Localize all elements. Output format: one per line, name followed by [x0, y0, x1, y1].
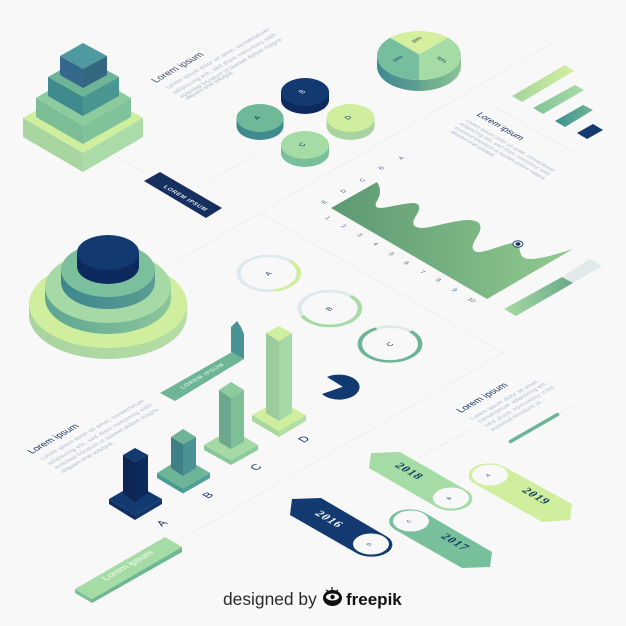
pill 2018 [369, 452, 472, 511]
folded ribbon label: LOREM IPSUM [180, 363, 226, 390]
bottom ribbon: Lorem ipsum: Lorem ipsum [99, 549, 157, 583]
area chart: 9 [450, 288, 458, 293]
bar axis letters [154, 434, 313, 528]
disc C [281, 131, 329, 167]
isometric bar C [204, 382, 258, 465]
text block: top right: aliquam erat volutpat. [448, 130, 497, 158]
text block: bottom left: Lorem ipsum dolor sit amet, consectetuer [40, 399, 147, 461]
area chart: D [340, 189, 349, 194]
text block: top right: adipiscing elit, sed diam nonummy nibh [457, 122, 552, 177]
area chart: 3 [355, 233, 363, 238]
area chart: 10 [465, 297, 477, 304]
ring C [346, 319, 434, 369]
area chart: C [359, 178, 368, 183]
folded ribbon label [160, 321, 244, 401]
stacked cylinders [29, 235, 187, 359]
disc A: A [253, 115, 263, 121]
heading: Lorem ipsum bottom right: Lorem ipsum [454, 381, 511, 415]
pie chart 3D: 30% [411, 36, 425, 44]
pill 2017: 2017 [437, 531, 473, 552]
bottom ribbon: Lorem ipsum [75, 537, 182, 603]
pill 2018: B [446, 496, 454, 501]
pill 2016: 2016 [311, 508, 347, 529]
ring C: C [385, 342, 396, 348]
disc B [281, 78, 329, 114]
area chart: 7 [418, 270, 426, 275]
icon: freepik mascot [323, 587, 342, 606]
bar axis letters: D [296, 434, 313, 444]
navy label: LOREM IPSUM [144, 172, 222, 218]
navy label: LOREM IPSUM: LOREM IPSUM [161, 185, 208, 212]
progress bar [504, 259, 602, 316]
text block: bottom right: consectetuer adipiscing elit, [477, 381, 550, 424]
pill 2018: 2018 [391, 460, 427, 481]
area chart: 6 [402, 261, 410, 266]
text block: top left: euismod tincidunt ut laoreet dolore magna [179, 38, 285, 99]
pie chart 3D [377, 31, 461, 91]
pill 2019 [469, 463, 572, 522]
text block: bottom right: Lorem ipsum dolor sit amet, [470, 379, 542, 421]
heading: Lorem ipsum right: Lorem ipsum [474, 111, 527, 142]
area chart: 4 [371, 242, 379, 247]
text block: bottom right: euismod tincidunt ut. [490, 400, 545, 432]
area chart [321, 156, 573, 304]
text block: bottom left [25, 399, 161, 474]
area chart: 5 [387, 252, 395, 257]
pill 2019: 2019 [518, 485, 554, 506]
text block: top left: aliquam erat volutpat. [184, 70, 237, 101]
green rounded line [510, 414, 558, 442]
disc B: B [298, 89, 308, 95]
disc D: D [344, 115, 354, 121]
text block: bottom right: sed diam nonummy nibh [484, 385, 557, 428]
footer: designed by freepik [223, 587, 402, 609]
pill 2017 [389, 509, 492, 568]
heading: Lorem ipsum: Lorem ipsum [149, 51, 207, 85]
legend bars top right [512, 65, 603, 139]
text block: bottom left: euismod tincidunt ut laoreet dolore magna [54, 408, 161, 470]
pac-man pie [322, 375, 360, 400]
pill 2016: D [366, 542, 374, 547]
area chart: 1 [323, 216, 331, 221]
bar axis letters: C [248, 462, 265, 472]
disc C: C [298, 142, 308, 148]
ring B [287, 284, 372, 333]
bar axis letters: B [200, 491, 217, 500]
isometric bar A [109, 448, 162, 520]
pill 2017: C [406, 519, 414, 524]
pill 2019: A [485, 473, 493, 478]
text block: top right [448, 111, 557, 181]
pill 2016 [290, 498, 392, 557]
bar axis letters: A [154, 518, 171, 528]
heading: Lorem ipsum bottom left: Lorem ipsum [25, 422, 82, 456]
pyramid of stacked cubes [23, 43, 143, 172]
text block: bottom left: adipiscing elit, sed diam nonummy nibh [47, 403, 155, 466]
text block: top left: adipiscing elit, sed diam nonummy nibh [172, 33, 279, 95]
area chart: E [321, 200, 329, 205]
ring A [226, 249, 311, 298]
footer: designed by freepik: freepik [346, 590, 402, 609]
chart marker [513, 241, 523, 247]
pie chart 3D: 30% [434, 56, 449, 64]
text block: top right: Lorem ipsum dolor sit amet, consectetuer [463, 119, 557, 173]
text block: top left [149, 28, 285, 101]
disc D [326, 104, 374, 140]
text block: top right: euismod tincidunt ut laoreet dolore magna [452, 126, 547, 181]
disc A [236, 104, 284, 140]
text block: bottom left: aliquam erat volutpat. [60, 441, 117, 474]
text block: bottom right [454, 379, 557, 432]
footer: designed by freepik: designed by [223, 589, 317, 609]
text block: top left: Lorem ipsum dolor sit amet, consectetuer [165, 28, 272, 90]
area chart: 2 [339, 224, 347, 229]
isometric bar B [157, 429, 210, 494]
ring B: B [325, 306, 335, 312]
isometric bar D [252, 326, 306, 437]
area chart: 8 [434, 278, 442, 283]
pie chart 3D: 30% [392, 55, 406, 63]
area chart: A [398, 156, 406, 161]
area chart: B [378, 166, 386, 171]
ring A: A [264, 271, 274, 277]
